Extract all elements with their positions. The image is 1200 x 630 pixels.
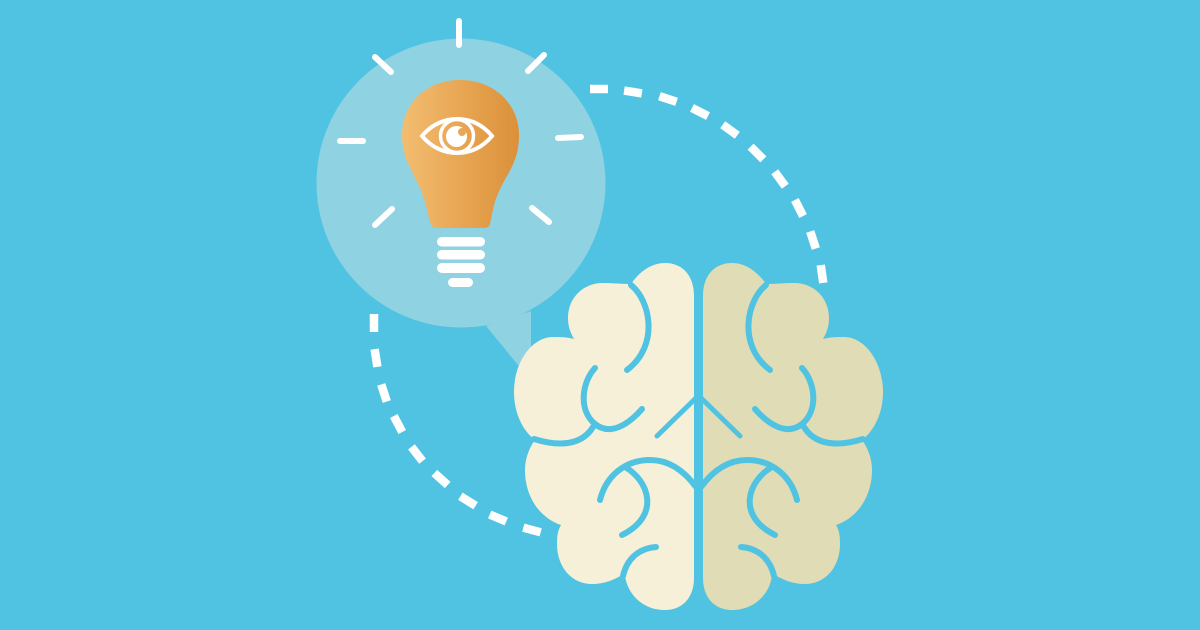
bulb glass	[402, 80, 519, 228]
speech bubble	[316, 38, 606, 375]
left hemisphere	[514, 263, 694, 610]
left folds	[534, 285, 696, 576]
right folds	[701, 285, 863, 576]
brain	[514, 263, 883, 610]
icon: eye	[422, 119, 492, 153]
bulb base	[437, 237, 485, 287]
light bulb	[402, 80, 519, 287]
light rays	[340, 21, 581, 225]
dashed arc: lower left	[370, 314, 542, 536]
dashed arc: upper right	[590, 85, 827, 284]
right hemisphere	[703, 263, 883, 610]
